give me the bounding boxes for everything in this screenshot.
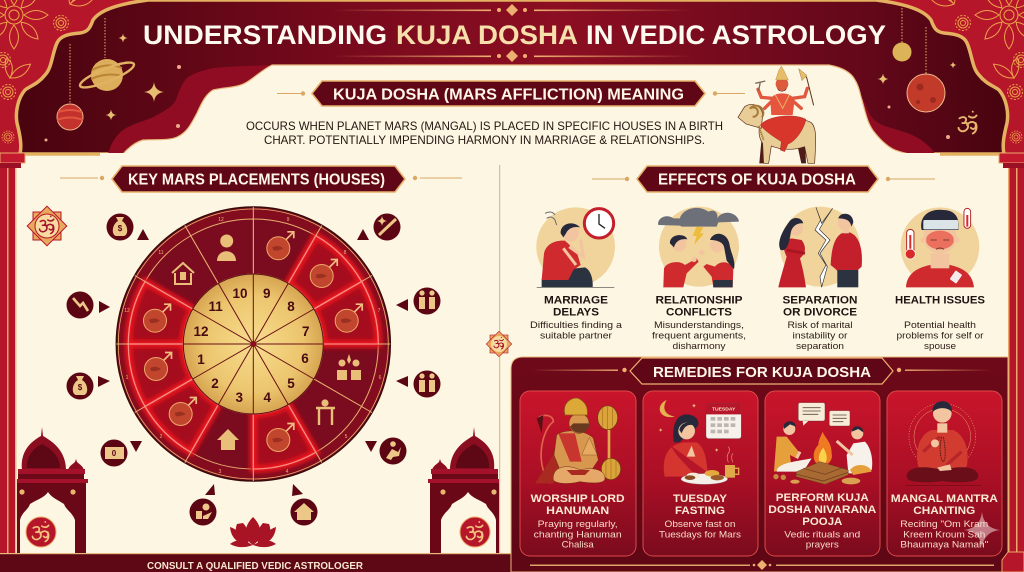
meaning heading: [277, 81, 745, 106]
header banner: [0, 0, 1024, 156]
label: prayers: [806, 538, 839, 550]
left temple: [17, 427, 88, 553]
meaning text: OCCURS WHEN PLANET MARS (MANGAL) IS PLACED IN SPECIFIC HOUSES IN A BIRTH: [246, 120, 723, 133]
decorative title rules: [333, 4, 692, 62]
title: [143, 20, 886, 50]
label: FASTING: [675, 505, 725, 517]
hanging planets right: [892, 8, 945, 112]
mars planet icons: [144, 232, 362, 452]
rim labels: 12: [218, 217, 224, 223]
rim labels: 9: [287, 217, 290, 223]
label: [768, 492, 877, 550]
rim labels: [124, 217, 382, 475]
title: KUJA DOSHA: [396, 20, 578, 50]
floral corner right: [930, 0, 1024, 143]
rim labels: 1: [126, 375, 129, 381]
inner house numbers: [193, 286, 309, 405]
gold arch: [16, 0, 1008, 154]
label: Tuesdays for Mars: [659, 528, 741, 540]
sparkle watermark: [964, 512, 1000, 548]
column base: [1002, 552, 1024, 572]
effect: separation or divorce: [778, 207, 862, 351]
floral corner left: [0, 0, 94, 143]
label: [530, 294, 623, 340]
heading: effects: EFFECTS OF KUJA DOSHA: [658, 172, 856, 188]
right temple: [428, 427, 499, 553]
label: [659, 493, 741, 540]
heading: remedies: REMEDIES FOR KUJA DOSHA: [653, 364, 871, 381]
label: TUESDAY: [673, 493, 727, 505]
illustration: Mangal riding a ram: [738, 66, 816, 163]
illustration: sick man with thermometers: [901, 207, 979, 287]
title: UNDERSTANDING: [143, 20, 387, 50]
stars left: [44, 34, 181, 142]
label: CONFLICTS: [666, 306, 732, 318]
label: WORSHIP LORD: [531, 493, 625, 505]
outer placement markers and icons: 0: [112, 449, 117, 458]
label: spouse: [924, 340, 956, 351]
inner house numbers: 9: [263, 286, 270, 301]
label: Praying regularly,: [538, 518, 618, 529]
label: problems for self or: [896, 330, 984, 340]
rim labels: 6: [379, 375, 382, 381]
label: MARRIAGE: [544, 294, 608, 306]
red wave left: [108, 65, 272, 154]
right panel: effects of kuja dosha: [530, 166, 985, 351]
house icons in wheel: [172, 234, 361, 450]
label: Vedic rituals and: [784, 528, 860, 540]
inner house numbers: 3: [236, 390, 244, 405]
inner house numbers: 6: [301, 351, 309, 366]
label: instability or: [792, 330, 848, 340]
rim labels: 2: [160, 434, 163, 440]
heading: key mars placements: KEY MARS PLACEMENTS (HOUSES): [128, 172, 385, 188]
cream header area: [123, 65, 909, 154]
label: HEALTH ISSUES: [895, 294, 985, 306]
label: OR DIVORCE: [783, 306, 857, 318]
label: frequent arguments,: [652, 330, 746, 340]
rim labels: 3: [219, 469, 222, 475]
title: IN VEDIC ASTROLOGY: [586, 20, 886, 50]
label: DELAYS: [553, 306, 599, 318]
rim labels: 5: [345, 434, 348, 440]
label: Chalisa: [562, 538, 595, 550]
heading: remedies: [532, 358, 992, 384]
hanging planets left: [57, 18, 136, 130]
label: Risk of marital: [788, 319, 852, 330]
rim labels: 8: [344, 250, 347, 256]
rim labels: 12: [124, 308, 130, 314]
label: [891, 493, 998, 550]
card: mangal mantra chanting: [887, 391, 1002, 556]
rim labels: 4: [286, 469, 289, 475]
label: RELATIONSHIP: [656, 294, 742, 306]
meaning heading: KUJA DOSHA (MARS AFFLICTION) MEANING: [333, 86, 684, 104]
label: [895, 294, 985, 351]
side columns: [0, 153, 1024, 563]
illustration: separated couple with crack: [778, 207, 862, 287]
outer placement markers and icons: $: [118, 224, 123, 233]
bottom ornament: [530, 560, 994, 570]
meaning text: [246, 120, 723, 147]
label: disharmony: [672, 340, 726, 351]
inner house numbers: 8: [287, 299, 295, 314]
red wave right: [850, 75, 935, 154]
card: tuesday fasting: [643, 391, 758, 556]
label: chanting Hanuman: [534, 528, 622, 540]
heading: key mars placements: [60, 166, 462, 192]
label: PERFORM KUJA: [776, 492, 869, 504]
illustration: arguing couple under storm: [658, 207, 739, 287]
label: [782, 294, 858, 351]
label: CHANTING: [913, 505, 975, 517]
effect: health issues: [895, 207, 985, 351]
left panel: key mars placements: [0, 166, 511, 572]
rim labels: 7: [378, 308, 381, 314]
illustration: woman fasting with calendar: [659, 400, 741, 484]
label: MANGAL MANTRA: [891, 493, 998, 505]
rim labels: 11: [158, 250, 164, 256]
label: separation: [796, 340, 844, 351]
label: [652, 294, 746, 351]
panel: remedies for kuja dosha: [511, 357, 1024, 572]
label: Observe fast on: [664, 518, 736, 529]
label: Reciting "Om Kram: [900, 518, 988, 529]
card: worship lord hanuman: [520, 391, 636, 556]
stars right and om: [878, 62, 977, 139]
illustration: man meditating: [905, 401, 982, 485]
label: SEPARATION: [782, 294, 858, 306]
label: Misunderstandings,: [654, 319, 744, 330]
illustration: woman fasting with calendar: TUESDAY: [712, 407, 736, 413]
label: POOJA: [802, 516, 843, 528]
center divider with om ornament: [486, 165, 512, 553]
label: Bhaumaya Namah": [900, 538, 988, 550]
inner house numbers: 1: [197, 352, 205, 367]
effect: relationship conflicts: [652, 207, 746, 351]
illustration: worried man with clock: [536, 207, 615, 288]
inner house numbers: 5: [287, 376, 295, 391]
card: perform kuja dosha nivarana pooja: [765, 391, 880, 556]
outer placement markers and icons: $: [78, 383, 83, 392]
footer band: CONSULT A QUALIFIED VEDIC ASTROLOGER: [147, 560, 363, 572]
inner house numbers: 10: [232, 286, 248, 301]
label: DOSHA NIVARANA: [768, 504, 877, 516]
meaning text: CHART. POTENTIALLY IMPENDING HARMONY IN MARRIAGE & RELATIONSHIPS.: [264, 134, 705, 147]
label: Potential health: [904, 319, 976, 330]
inner house numbers: 2: [211, 376, 219, 391]
inner house numbers: 12: [193, 324, 209, 339]
footer band: [0, 553, 511, 572]
inner house numbers: 7: [302, 324, 309, 339]
label: HANUMAN: [546, 505, 609, 517]
illustration: priests at fire ritual: [773, 403, 872, 484]
icon: om mandala: [27, 206, 67, 246]
house wheel chart: [114, 204, 393, 484]
label: Difficulties finding a: [530, 319, 623, 330]
effect: marriage delays: [530, 207, 623, 340]
illustration: Hanuman with mace: [535, 398, 621, 483]
inner house numbers: 4: [264, 390, 272, 405]
label: [531, 493, 625, 550]
outer placement markers and icons: [66, 214, 440, 526]
lotus: [230, 517, 276, 547]
heading: effects: [592, 166, 935, 192]
label: suitable partner: [540, 330, 612, 340]
inner house numbers: 11: [209, 299, 223, 314]
label: Kreem Kroum Sah: [903, 528, 985, 540]
